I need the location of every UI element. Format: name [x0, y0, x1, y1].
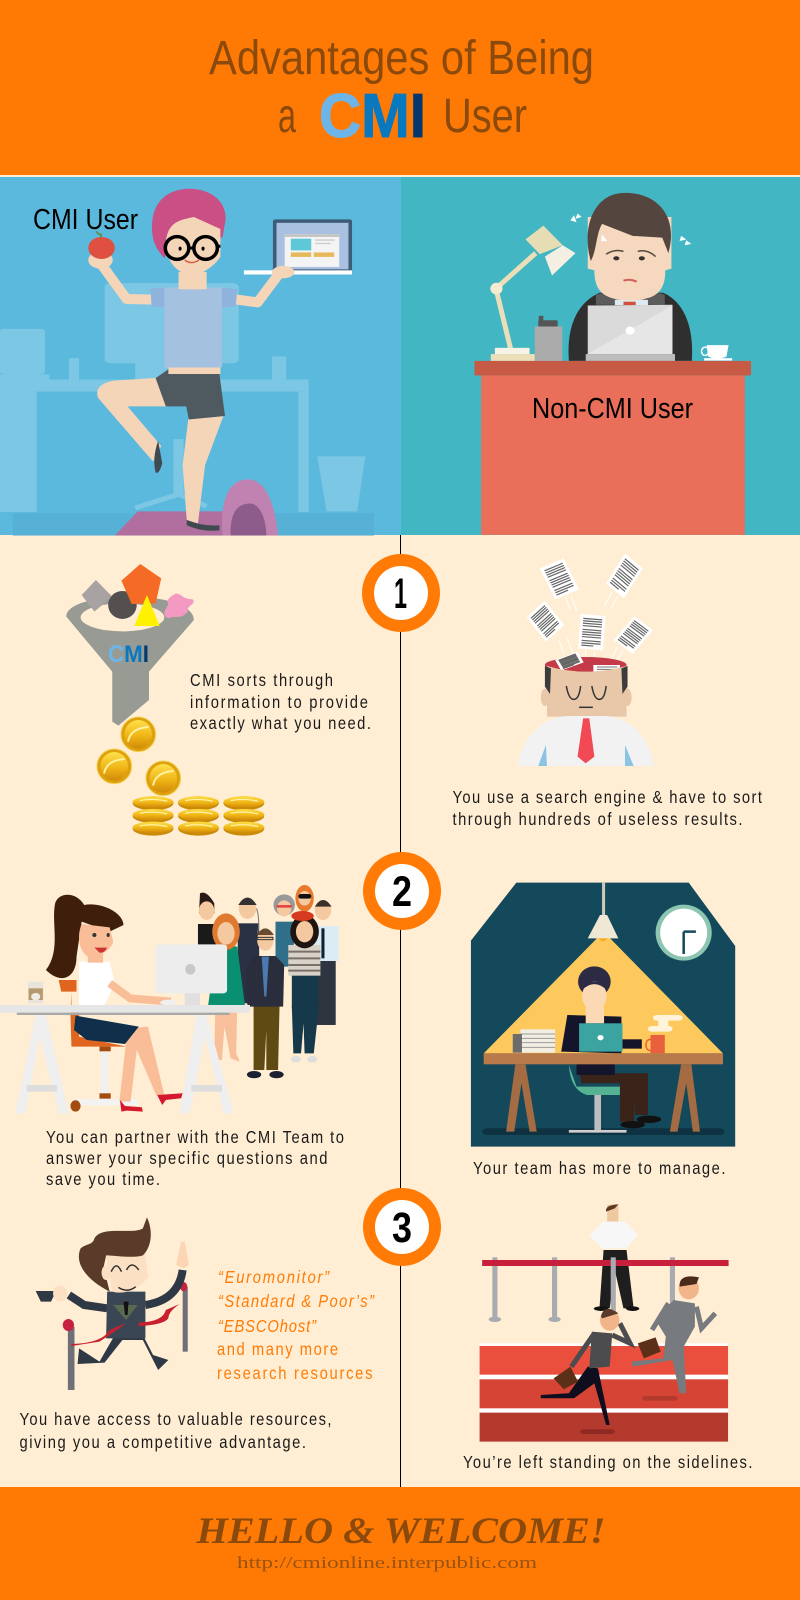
coffee cup	[702, 345, 732, 361]
apple	[88, 231, 115, 259]
badge 2	[363, 852, 441, 930]
barrier rope	[482, 1260, 729, 1266]
badge 1	[362, 554, 440, 632]
badge 1: 1	[394, 570, 407, 618]
man	[518, 652, 654, 766]
section 3 right: sidelined man and runners	[480, 1204, 729, 1442]
list: research resources: research resources	[217, 1364, 372, 1383]
label: CMI User: CMI User	[33, 204, 138, 236]
chair	[569, 1065, 637, 1133]
text: CMI sorts	[190, 671, 371, 733]
text: CMI sorts: exactly what you need.	[190, 714, 371, 733]
funnel	[66, 564, 194, 726]
list: research resources	[217, 1268, 375, 1383]
desk	[0, 1005, 250, 1113]
papers	[527, 553, 653, 654]
section 2 left: woman at desk and team	[0, 885, 339, 1113]
runner woman	[541, 1309, 630, 1425]
text: valuable resources: giving you a competitive advantage.	[20, 1433, 306, 1452]
title	[209, 32, 594, 151]
section 1 left: funnel and coins	[66, 564, 264, 836]
text: search engine	[452, 788, 762, 829]
funnel logo: CMI	[108, 641, 149, 668]
list: research resources: “EBSCOhost”	[218, 1317, 317, 1336]
footer url: http://cmionline.interpublic.com	[237, 1553, 537, 1572]
desk	[474, 361, 751, 535]
title: a	[278, 90, 296, 143]
man	[568, 193, 692, 361]
text: CMI sorts: CMI sorts through	[190, 671, 333, 690]
text: partner with CMI team: save you time.	[46, 1170, 160, 1189]
woman	[46, 895, 183, 1112]
mug and steam	[646, 1015, 683, 1053]
list: research resources: “Standard & Poor’s”	[218, 1292, 375, 1311]
list: research resources: “Euromonitor”	[218, 1268, 330, 1287]
illustration: office and character	[0, 189, 374, 536]
clock	[656, 905, 712, 961]
text: CMI sorts: information to provide	[190, 693, 368, 712]
stanchion posts	[489, 1257, 675, 1322]
table	[484, 1053, 723, 1132]
suit	[106, 1292, 145, 1338]
badge 3	[363, 1188, 441, 1266]
team	[198, 885, 339, 1078]
title: CMI	[319, 82, 426, 151]
list: research resources: and many more	[217, 1340, 338, 1359]
track	[480, 1343, 728, 1442]
illustration: stressed man at desk	[474, 193, 751, 535]
coffee cup	[28, 982, 43, 1003]
text: partner with CMI team	[46, 1128, 344, 1189]
footer band	[0, 1487, 800, 1600]
cup and hands	[36, 1242, 189, 1302]
arms	[69, 1270, 183, 1308]
coins	[97, 717, 264, 836]
panel: non-CMI user	[401, 177, 800, 535]
legs	[183, 413, 224, 523]
section 2 right: overworked woman poster	[471, 883, 735, 1147]
laptop	[244, 219, 352, 274]
text: left standing: You’re left standing on the sidelines.	[463, 1453, 752, 1472]
footer heading: HELLO & WELCOME!	[195, 1511, 606, 1552]
legs	[78, 1335, 168, 1370]
badge 3: 3	[392, 1204, 412, 1252]
center divider	[400, 535, 401, 1487]
woman	[561, 966, 661, 1128]
label: Non-CMI User: Non-CMI User	[532, 393, 693, 425]
header band	[0, 0, 800, 175]
text: search engine: You use a search engine & have to sort	[452, 788, 762, 807]
section 1 right: head with papers	[518, 553, 654, 766]
books	[513, 1029, 555, 1053]
bottle	[535, 316, 562, 361]
text: valuable resources	[20, 1410, 332, 1452]
text: valuable resources: You have access to valuable resources,	[20, 1410, 332, 1429]
lamp and light	[484, 883, 723, 1053]
monitor	[156, 944, 227, 1005]
section 3 left: winning businessman	[36, 1217, 189, 1390]
laptop	[586, 305, 675, 361]
shorts	[156, 369, 225, 419]
head	[79, 1217, 151, 1293]
text: partner with CMI team: You can partner with the CMI Team to	[46, 1128, 344, 1147]
head	[152, 189, 226, 289]
lamp	[490, 226, 576, 361]
text: search engine: through hundreds of useless results.	[452, 810, 743, 829]
t-shirt	[151, 288, 237, 367]
panel: CMI user	[0, 177, 401, 536]
title: User	[443, 90, 527, 143]
arms	[102, 265, 156, 300]
text: partner with CMI team: answer your specific questions and	[46, 1149, 328, 1168]
badge 2: 2	[392, 868, 412, 916]
runner man	[632, 1276, 715, 1393]
standing man	[589, 1204, 639, 1311]
ribbon	[71, 1304, 180, 1346]
ribbon posts	[63, 1282, 188, 1390]
text: team has more: Your team has more to manage.	[473, 1159, 725, 1178]
title: Advantages of Being	[209, 32, 594, 85]
